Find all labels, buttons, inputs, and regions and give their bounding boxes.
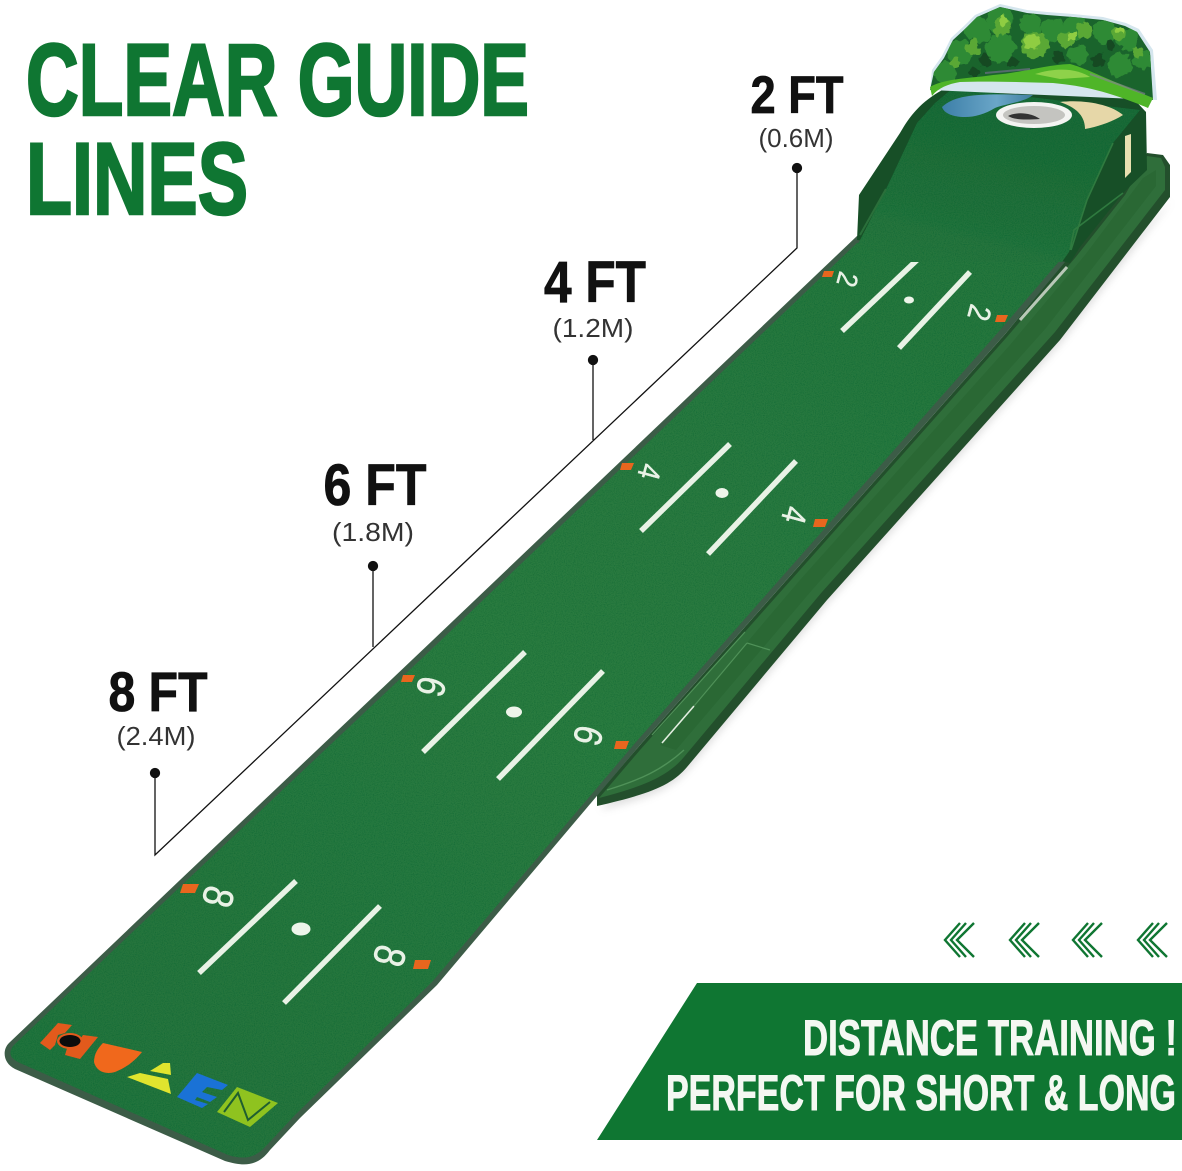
distance numbers: 8 (192, 881, 242, 912)
target dots (292, 296, 914, 936)
label: 2 FT: (0.6M) (758, 123, 834, 153)
sand bunker (1060, 101, 1123, 129)
lawn (930, 64, 1153, 108)
plastic base tray (597, 153, 1172, 810)
label: 6 FT: (1.8M) (332, 517, 414, 547)
banner (597, 983, 1182, 1140)
label: 4 FT: (1.2M) (552, 313, 634, 343)
title: CLEAR GUIDE (26, 23, 529, 137)
hole cup (996, 102, 1072, 128)
label: 8 FT: 8 FT (108, 660, 208, 723)
title: LINES (26, 122, 248, 236)
label: 8 FT (108, 660, 208, 751)
water hazard (942, 94, 1033, 117)
distance numbers: 4 (774, 502, 816, 528)
ramp side walls (857, 86, 1147, 263)
label: 6 FT (324, 453, 426, 547)
title (26, 23, 529, 236)
label: 2 FT (750, 66, 844, 153)
ramp with hole (857, 86, 1147, 263)
label: 4 FT: 4 FT (544, 250, 646, 315)
putting mat (5, 236, 1070, 1164)
scenic backdrop (925, 0, 1160, 108)
label: 8 FT: (2.4M) (116, 721, 196, 751)
brand logo (40, 1023, 278, 1127)
distance numbers: 6 (407, 672, 455, 701)
ramp felt (858, 88, 1140, 262)
label: 2 FT: 2 FT (750, 66, 844, 125)
distance numbers: 6 (564, 721, 612, 750)
distance numbers: 4 (630, 460, 668, 483)
distance numbers: 2 (960, 301, 998, 324)
label: 4 FT (544, 250, 646, 343)
distance numbers: 8 (363, 940, 415, 971)
guide lines (199, 260, 970, 1003)
distance numbers: 2 (830, 269, 864, 290)
distance numbers (192, 269, 998, 971)
label: 6 FT: 6 FT (324, 453, 426, 518)
wall window (1125, 134, 1131, 178)
orange markers (180, 271, 1008, 969)
leader lines (150, 164, 802, 855)
chevrons (945, 923, 1167, 957)
